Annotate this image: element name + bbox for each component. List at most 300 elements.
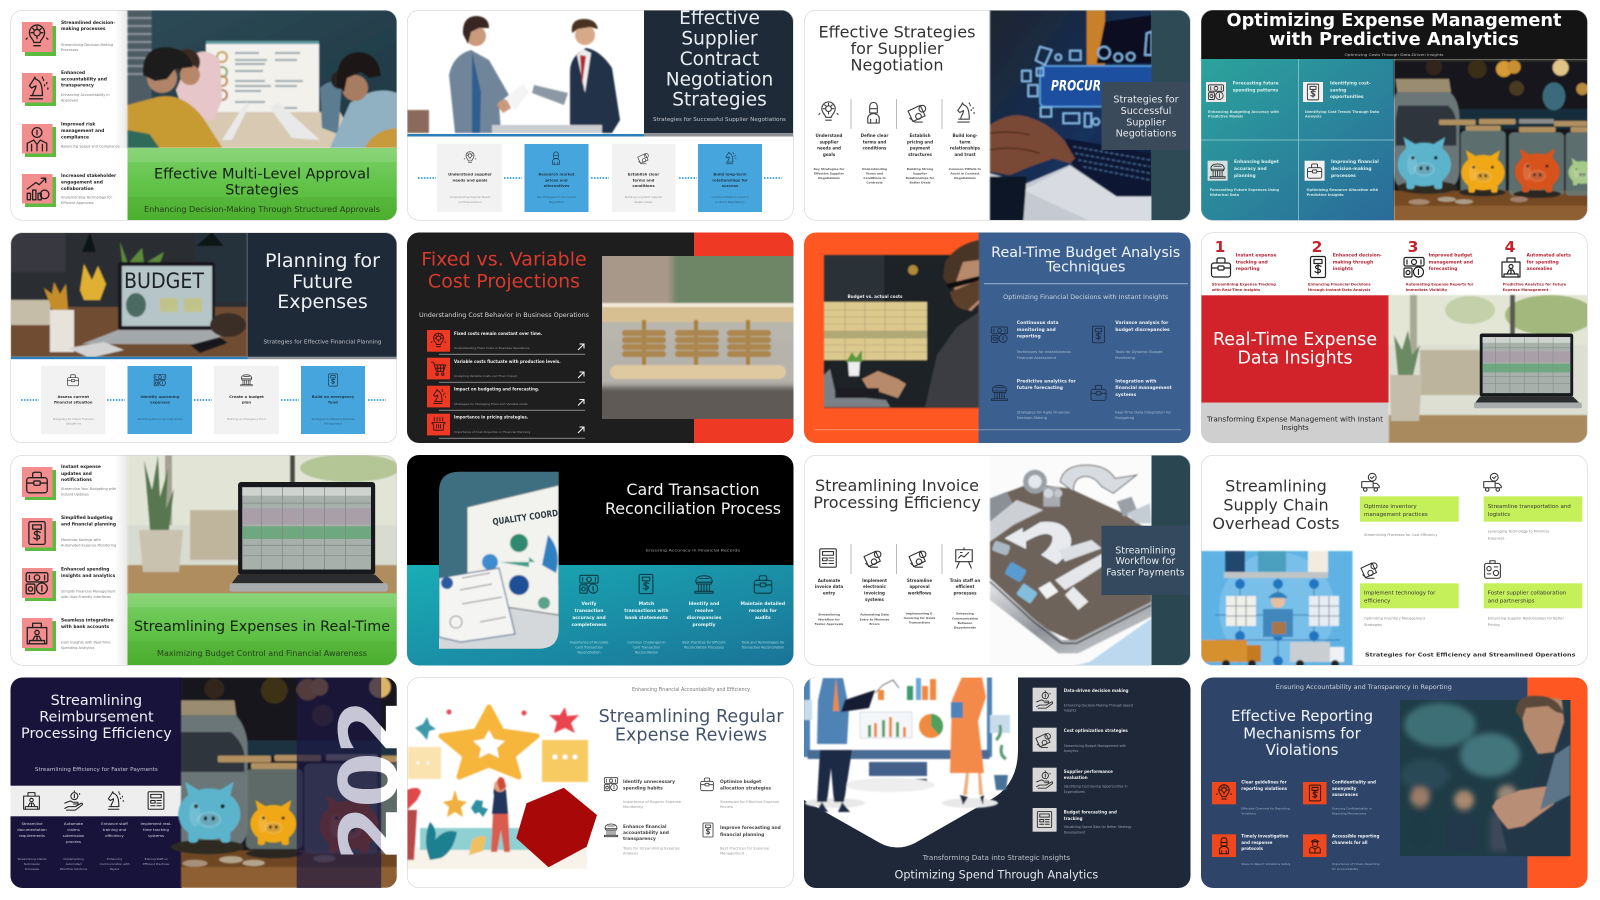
grey subtitle block	[1201, 403, 1389, 444]
item 1	[992, 320, 1071, 360]
item 3: evaluation	[1064, 775, 1088, 780]
item 4: Real-Time Data Integration for	[1115, 410, 1171, 414]
column 3: promptly	[692, 622, 716, 628]
item 3: transparency	[623, 836, 656, 842]
step 4: success	[722, 183, 739, 188]
title: Effective Reporting	[1231, 707, 1373, 725]
column 1: entry	[823, 590, 835, 596]
item 3	[1033, 768, 1127, 794]
card: Streamlining Supply Chain Overhead Costs	[1201, 455, 1588, 668]
step 4	[1502, 238, 1571, 292]
item 3: Strategies for Agile Financial	[1017, 410, 1070, 414]
photo: metallic workflow arrows	[990, 455, 1152, 666]
column 1: transaction	[575, 608, 603, 614]
green title band	[128, 593, 398, 666]
column 3: resolve	[695, 608, 713, 614]
item 4: Integration with	[1115, 378, 1156, 384]
item 4: channels for all	[1332, 840, 1368, 845]
card: Optimizing Spend Through Analytics	[800, 675, 1190, 888]
row 1: Fixed costs remain constant over time.	[454, 331, 543, 336]
column 1: Importance of Accurate	[570, 640, 608, 644]
photo: laptop by window	[128, 454, 400, 595]
column 2: terms and	[863, 140, 886, 144]
item 4	[1303, 834, 1380, 871]
column 3: Better Deals	[909, 180, 931, 184]
item 1	[1360, 473, 1459, 537]
item 3: Forecasting Future Expenses Using	[1210, 188, 1280, 192]
item 3: Historical Data	[1210, 193, 1240, 197]
column 2: process	[66, 839, 81, 844]
title: Expenses	[277, 291, 368, 313]
item 2: saving	[1330, 88, 1346, 94]
item 2: and financial planning	[61, 522, 116, 528]
column 1: requirements	[19, 833, 45, 838]
title	[154, 166, 370, 198]
step 3: conditions	[632, 183, 655, 188]
column 3	[906, 105, 935, 184]
column 3: Reconciliation Processes	[684, 645, 724, 649]
column 1	[815, 549, 844, 626]
column 2: Automating Data	[860, 613, 889, 617]
column 4	[950, 548, 980, 630]
photo: budget laptop	[10, 232, 248, 358]
item 2	[701, 778, 780, 809]
column 2: Reconciliation	[635, 651, 658, 655]
item 3: Identifying Cost-Saving Opportunities in	[1064, 785, 1127, 789]
title: Processing Efficiency	[813, 493, 981, 512]
item 4: Accessible reporting	[1332, 834, 1379, 838]
item 3: accuracy and	[1234, 166, 1267, 172]
step 2: insights	[1333, 266, 1353, 272]
item 1: Instant expense	[61, 464, 101, 470]
title: Mechanisms for	[1243, 724, 1362, 742]
item 4	[22, 618, 114, 651]
column 1	[17, 821, 47, 871]
item 4: Pricing	[1488, 623, 1500, 627]
step 4: Predictive Analytics for Future	[1503, 282, 1567, 286]
step 3: Building Long-Term Supplier	[625, 195, 663, 199]
mini table heading: Budget vs. actual costs	[847, 294, 903, 299]
item 1: Violations	[1241, 812, 1256, 816]
photo: laptop by window	[1389, 295, 1595, 444]
item 4: Optimizing Resource Allocation with	[1307, 188, 1379, 192]
item 1: Streamline Your Budgeting with	[61, 487, 116, 491]
step 2	[524, 144, 588, 212]
column 2: electronic	[863, 584, 887, 589]
column 1: Understand	[816, 133, 843, 138]
item 1: reporting violations	[1241, 786, 1288, 791]
procurement screen label: PROCUR	[1051, 78, 1101, 94]
item 1: Streamlining Processes for Cost Efficiency	[1364, 533, 1437, 537]
item 3	[22, 122, 120, 157]
connector dots	[21, 399, 386, 401]
step 4: Expense Management	[1503, 288, 1549, 292]
item 3: Tools for Streamlining Expense	[622, 846, 680, 850]
column 1: Faster Approvals	[815, 622, 844, 626]
title: Real-Time Expense	[1213, 330, 1377, 350]
column 3: Enhancing	[107, 857, 122, 861]
step 1: and Expectations	[458, 200, 482, 204]
title: Streamlining	[51, 693, 142, 709]
item 3: Analysis	[623, 852, 638, 856]
step 2: alternatives	[544, 183, 570, 188]
subtitle: Streamlining Efficiency for Faster Payments	[35, 767, 158, 773]
row 1: Understanding Fixed Costs in Business Operations	[454, 346, 530, 350]
column 2: bank statements	[625, 615, 668, 621]
card: Card Transaction Reconciliation Process	[407, 455, 794, 666]
item 4: Improve forecasting and	[720, 825, 781, 831]
callout panel: Supplier	[1126, 118, 1166, 128]
step 3: plan	[242, 400, 251, 404]
title	[605, 480, 781, 518]
item 3: Supplier performance	[1064, 769, 1113, 774]
step 1: Streamlining Expense Tracking	[1212, 282, 1276, 286]
title: Effective Strategies	[818, 22, 976, 42]
title: Fixed vs. Variable	[421, 248, 587, 270]
column 3: approval	[909, 584, 930, 589]
title	[1231, 707, 1373, 759]
step 3: Automating Expense Reports for	[1406, 282, 1474, 286]
column 3: Streamline	[907, 578, 932, 583]
item 2	[1303, 80, 1380, 118]
item 1	[1212, 780, 1290, 816]
step 3	[612, 144, 676, 212]
illustration: analysts at monitor	[800, 675, 1018, 848]
photo: piggy banks in jars	[1394, 59, 1596, 221]
column 1: completeness	[571, 622, 607, 628]
column 2: invoicing	[864, 590, 885, 596]
column 1: Workflow for	[818, 617, 840, 621]
step 2	[128, 366, 192, 434]
subtitle: Enhancing Financial Accountability and Efficiency	[632, 687, 750, 693]
title: Processing Efficiency	[21, 726, 172, 742]
column 2: Understanding	[862, 167, 887, 171]
title: Supplier	[681, 28, 758, 50]
item 3: accountability and	[623, 830, 669, 836]
column 1: Effective Supplier	[814, 172, 844, 176]
item 2: Cost optimization strategies	[1064, 728, 1128, 733]
step 4: Contract Negotiations	[715, 200, 745, 204]
column 4: time tracking	[143, 827, 169, 832]
item 4: decision-making	[1331, 166, 1372, 172]
item 4: Improving financial	[1331, 159, 1379, 165]
item 4: systems	[1115, 392, 1136, 398]
item 2: Expenses	[1488, 536, 1505, 540]
column 4: Transaction Reconciliation	[740, 645, 784, 649]
subtitle: Maximizing Budget Control and Financial Awareness	[157, 649, 367, 658]
callout panel: Successful	[1121, 106, 1171, 117]
title: Card Transaction	[626, 480, 760, 499]
item 4: Best Practices for Expense	[720, 846, 770, 850]
step 2: Key Strategies for Successful	[537, 195, 576, 199]
dark title panel	[248, 232, 398, 357]
title: Data Insights	[1237, 348, 1353, 368]
step 3: forecasting	[1429, 266, 1457, 272]
callout panel: Workflow for	[1116, 556, 1175, 567]
item 1: Insights	[1064, 708, 1077, 712]
item 3	[992, 378, 1076, 420]
column 3	[904, 551, 936, 624]
card: Fixed vs. Variable Cost Projections	[407, 232, 804, 444]
column 4: efficient	[956, 584, 974, 589]
subtitle: Optimizing Costs Through Data-Driven Insights	[1344, 53, 1444, 57]
item 4: Efficient Approvals	[61, 201, 94, 205]
item 4: for Accountability	[1332, 867, 1359, 871]
title: Strategies	[672, 90, 767, 110]
item 3: Steps to Report Violations Safely	[1241, 862, 1291, 866]
column 4	[140, 821, 172, 866]
item 1: Importance of Regular Expense	[623, 800, 682, 804]
step 2: Enhancing Financial Decisions	[1308, 282, 1372, 286]
column 4: and trust	[954, 152, 976, 157]
step 1: Assess current	[57, 394, 89, 399]
title: Reimbursement	[39, 710, 154, 726]
column 3: training and	[103, 827, 127, 832]
row 4: Importance of Cost Projection in Financial Planning	[454, 430, 530, 434]
title: Supply Chain	[1223, 496, 1329, 514]
title	[813, 476, 981, 512]
title: Strategies	[225, 182, 299, 198]
step 1: Budgeting for Future Financial	[53, 417, 94, 421]
item 2: assurances	[1332, 792, 1358, 797]
column 4: Departments	[954, 626, 976, 630]
item 3: Simplify Financial Management	[61, 590, 116, 594]
budget screen word: BUDGET	[124, 269, 204, 293]
item 2	[1484, 473, 1582, 540]
title: Streamlining Expenses in Real-Time	[134, 619, 390, 635]
item 2: Streamline transportation and	[1488, 504, 1571, 510]
item 1: spending habits	[623, 786, 663, 792]
item 3: Timely investigation	[1241, 834, 1288, 838]
grey subtitle block: Insights	[1281, 424, 1309, 432]
column 1	[814, 102, 845, 180]
item 4	[22, 173, 117, 207]
title: Reconciliation Process	[605, 499, 781, 518]
column 1: accuracy and	[572, 615, 606, 621]
item 3	[1208, 159, 1280, 197]
green title band	[128, 148, 398, 221]
column 3: pricing and	[907, 140, 933, 144]
item 3: Expenditures	[1064, 790, 1085, 794]
item 2	[1093, 320, 1170, 360]
column 4: Maintain detailed	[741, 601, 785, 607]
title: Optimizing Spend Through Analytics	[895, 868, 1098, 882]
step 4: Strategies for Effective Expense	[311, 417, 355, 421]
column 2	[861, 102, 888, 184]
photo: man pointing with team behind	[1400, 696, 1570, 856]
card: Optimizing Expense Management with Predictive Analytics	[1201, 10, 1596, 221]
item 1: reporting	[1017, 334, 1041, 340]
item 1: Clear guidelines for	[1241, 780, 1287, 784]
column 2: Workflow Solutions	[60, 867, 88, 871]
column 2: Card Transaction	[633, 645, 660, 649]
item 1	[1206, 80, 1279, 118]
step 3: 3	[1408, 238, 1418, 256]
item 3: insights and analytics	[61, 573, 116, 579]
step 3: terms and	[633, 178, 655, 182]
column 1: documentation	[17, 827, 47, 832]
step 4: anomalies	[1526, 266, 1553, 272]
item 4: Seamless integration	[61, 618, 114, 624]
step 4	[301, 366, 365, 434]
item 2: budget discrepancies	[1115, 327, 1170, 333]
photo: quality certificates	[439, 471, 559, 650]
item 4: Foster supplier collaboration	[1488, 590, 1567, 596]
column 3: efficiency	[105, 833, 125, 838]
card: Effective Strategies for Supplier Negotiation	[804, 10, 1190, 221]
subtitle: Strategies for Effective Financial Planning	[264, 340, 382, 346]
column 3: Establish	[909, 133, 931, 138]
step 3: Building an Emergency Fund	[227, 417, 266, 421]
step 1: Obligations	[66, 422, 82, 426]
item 1: spending patterns	[1233, 88, 1278, 94]
column 2: Entry to Minimize	[860, 617, 889, 621]
column 4: audits	[755, 615, 771, 621]
item 2: Identifying cost-	[1330, 80, 1371, 86]
item 1: updates and	[61, 471, 92, 477]
column 2: Implement	[862, 578, 887, 583]
item 1	[22, 464, 116, 500]
column 4: Communication	[952, 616, 978, 620]
title: Negotiation	[666, 70, 773, 90]
step 3	[214, 366, 279, 434]
dark overlay band	[297, 677, 381, 888]
item 3: Balancing Speed and Compliance	[61, 144, 120, 148]
item 3: with User-Friendly Interfaces	[61, 595, 111, 599]
step 3: management and	[1429, 260, 1473, 266]
item 3: Enhancing budget	[1234, 159, 1279, 165]
item 3: and response	[1241, 840, 1273, 845]
item 1: Streamlined decision-	[61, 20, 115, 26]
item 2: transparency	[61, 82, 94, 88]
step 2: Research market	[538, 172, 575, 176]
row 3: Strategies for Managing Fixed and Variable Costs	[454, 402, 528, 406]
column 2: Define clear	[861, 133, 888, 138]
item 2	[1033, 728, 1128, 753]
item 2: accountability and	[61, 76, 107, 82]
step 4	[698, 144, 762, 212]
column 1: Negotiations	[818, 176, 840, 180]
step 1: reporting	[1236, 266, 1260, 272]
column 4: processes	[953, 590, 977, 596]
callout panel	[1102, 82, 1190, 150]
item 2: Identifying Cost Trends Through Data	[1305, 110, 1380, 114]
item 2: Approvals	[61, 98, 79, 102]
illustration: stars and speech bubbles	[407, 707, 588, 869]
step 1: needs and goals	[453, 178, 488, 182]
card: Streamlining Expenses in Real-Time	[10, 454, 400, 666]
title: Optimizing Expense Management	[1226, 11, 1562, 31]
item 1: Enhancing Decision-Making Through Spend	[1064, 704, 1133, 708]
title	[1226, 11, 1562, 50]
step 1: tracking and	[1236, 260, 1268, 266]
item 2	[22, 70, 110, 106]
item 2: Confidentiality and	[1332, 780, 1376, 784]
column 2: submission	[63, 833, 85, 838]
step 3: Relationships	[635, 200, 653, 204]
step 1: 1	[1215, 238, 1225, 256]
item 4: Spending Analytics	[61, 646, 95, 650]
item 2: Ensuring Confidentiality in	[1332, 806, 1372, 810]
item 1: Predictive Models	[1208, 114, 1243, 118]
column 1: Verify	[582, 601, 597, 607]
icon band	[10, 786, 182, 816]
item 2: logistics	[1488, 512, 1510, 518]
title: Expense Reviews	[615, 726, 767, 746]
item 2: opportunities	[1330, 94, 1364, 100]
title: Violations	[1266, 741, 1339, 759]
title	[421, 248, 587, 292]
item 1: management practices	[1364, 512, 1428, 518]
item 3: future forecasting	[1017, 385, 1063, 391]
step 3: Immediate Visibility	[1406, 288, 1448, 292]
item 3	[22, 566, 116, 601]
title: Contract	[680, 49, 759, 70]
item 2	[22, 515, 116, 551]
item 3: Enhanced spending	[61, 566, 109, 572]
card: Streamlining Reimbursement Processing Efficiency	[10, 676, 416, 888]
column 4	[740, 576, 785, 649]
step 4: Build an emergency	[312, 394, 355, 399]
item 1: notifications	[61, 477, 92, 483]
column 2: Errors	[869, 622, 880, 626]
item 4	[1033, 808, 1132, 834]
item 1: Forecasting future	[1233, 80, 1279, 86]
step 4: Management	[324, 422, 342, 426]
subtitle: Enhancing Decision-Making Through Structured Approvals	[144, 205, 380, 214]
row 2: Variable costs fluctuate with production levels.	[454, 359, 561, 364]
row 3	[427, 386, 585, 411]
item 4	[703, 823, 781, 856]
column 1: Streamline	[21, 821, 43, 826]
illustration: supply chain network	[1201, 551, 1352, 668]
item 4: processes	[1331, 173, 1356, 179]
step 2: expenses	[150, 400, 171, 404]
card: Effective Supplier Contract Negotiation Strategies	[407, 8, 794, 220]
column 4: Train staff on	[950, 578, 980, 583]
item 1: Instant Updates	[61, 492, 89, 496]
item 4: Development	[1064, 830, 1086, 834]
column 4: records for	[749, 608, 778, 614]
title	[1213, 330, 1377, 368]
item 4: Gain Insights with Real-Time	[61, 640, 111, 644]
column 4: Implement real-	[140, 821, 172, 826]
column 1	[570, 575, 608, 655]
item 4: and partnerships	[1488, 598, 1535, 604]
column 1: Streamlining	[818, 613, 840, 617]
card: Effective Reporting Mechanisms for Violations	[1201, 678, 1588, 888]
column 2: transactions with	[624, 608, 669, 614]
item 2: Reporting Mechanisms	[1332, 812, 1367, 816]
column 4: relationships	[950, 146, 981, 150]
column 4: Negotiations	[954, 176, 976, 180]
photo: wooden abacus with coins	[590, 246, 804, 429]
step 2: Identifying Recurring Costs Ahead	[137, 417, 183, 421]
column 2: Automate	[64, 821, 84, 826]
subtitle: Ensuring Accountability and Transparency in Reporting	[1276, 684, 1452, 691]
item 4: engagement and	[61, 180, 103, 186]
column 4: Build long-	[953, 133, 978, 138]
column 2	[624, 574, 669, 655]
title: Future	[292, 271, 353, 293]
step 2: Identify upcoming	[141, 394, 180, 399]
column 4: term	[959, 140, 971, 144]
item 2: Maximize Savings with	[61, 538, 101, 542]
item 2: Optimize budget	[720, 779, 761, 785]
subtitle: Understanding Cost Behavior in Business Operations	[419, 312, 589, 319]
item 1	[22, 20, 115, 56]
item 3: efficiency	[1364, 598, 1391, 604]
